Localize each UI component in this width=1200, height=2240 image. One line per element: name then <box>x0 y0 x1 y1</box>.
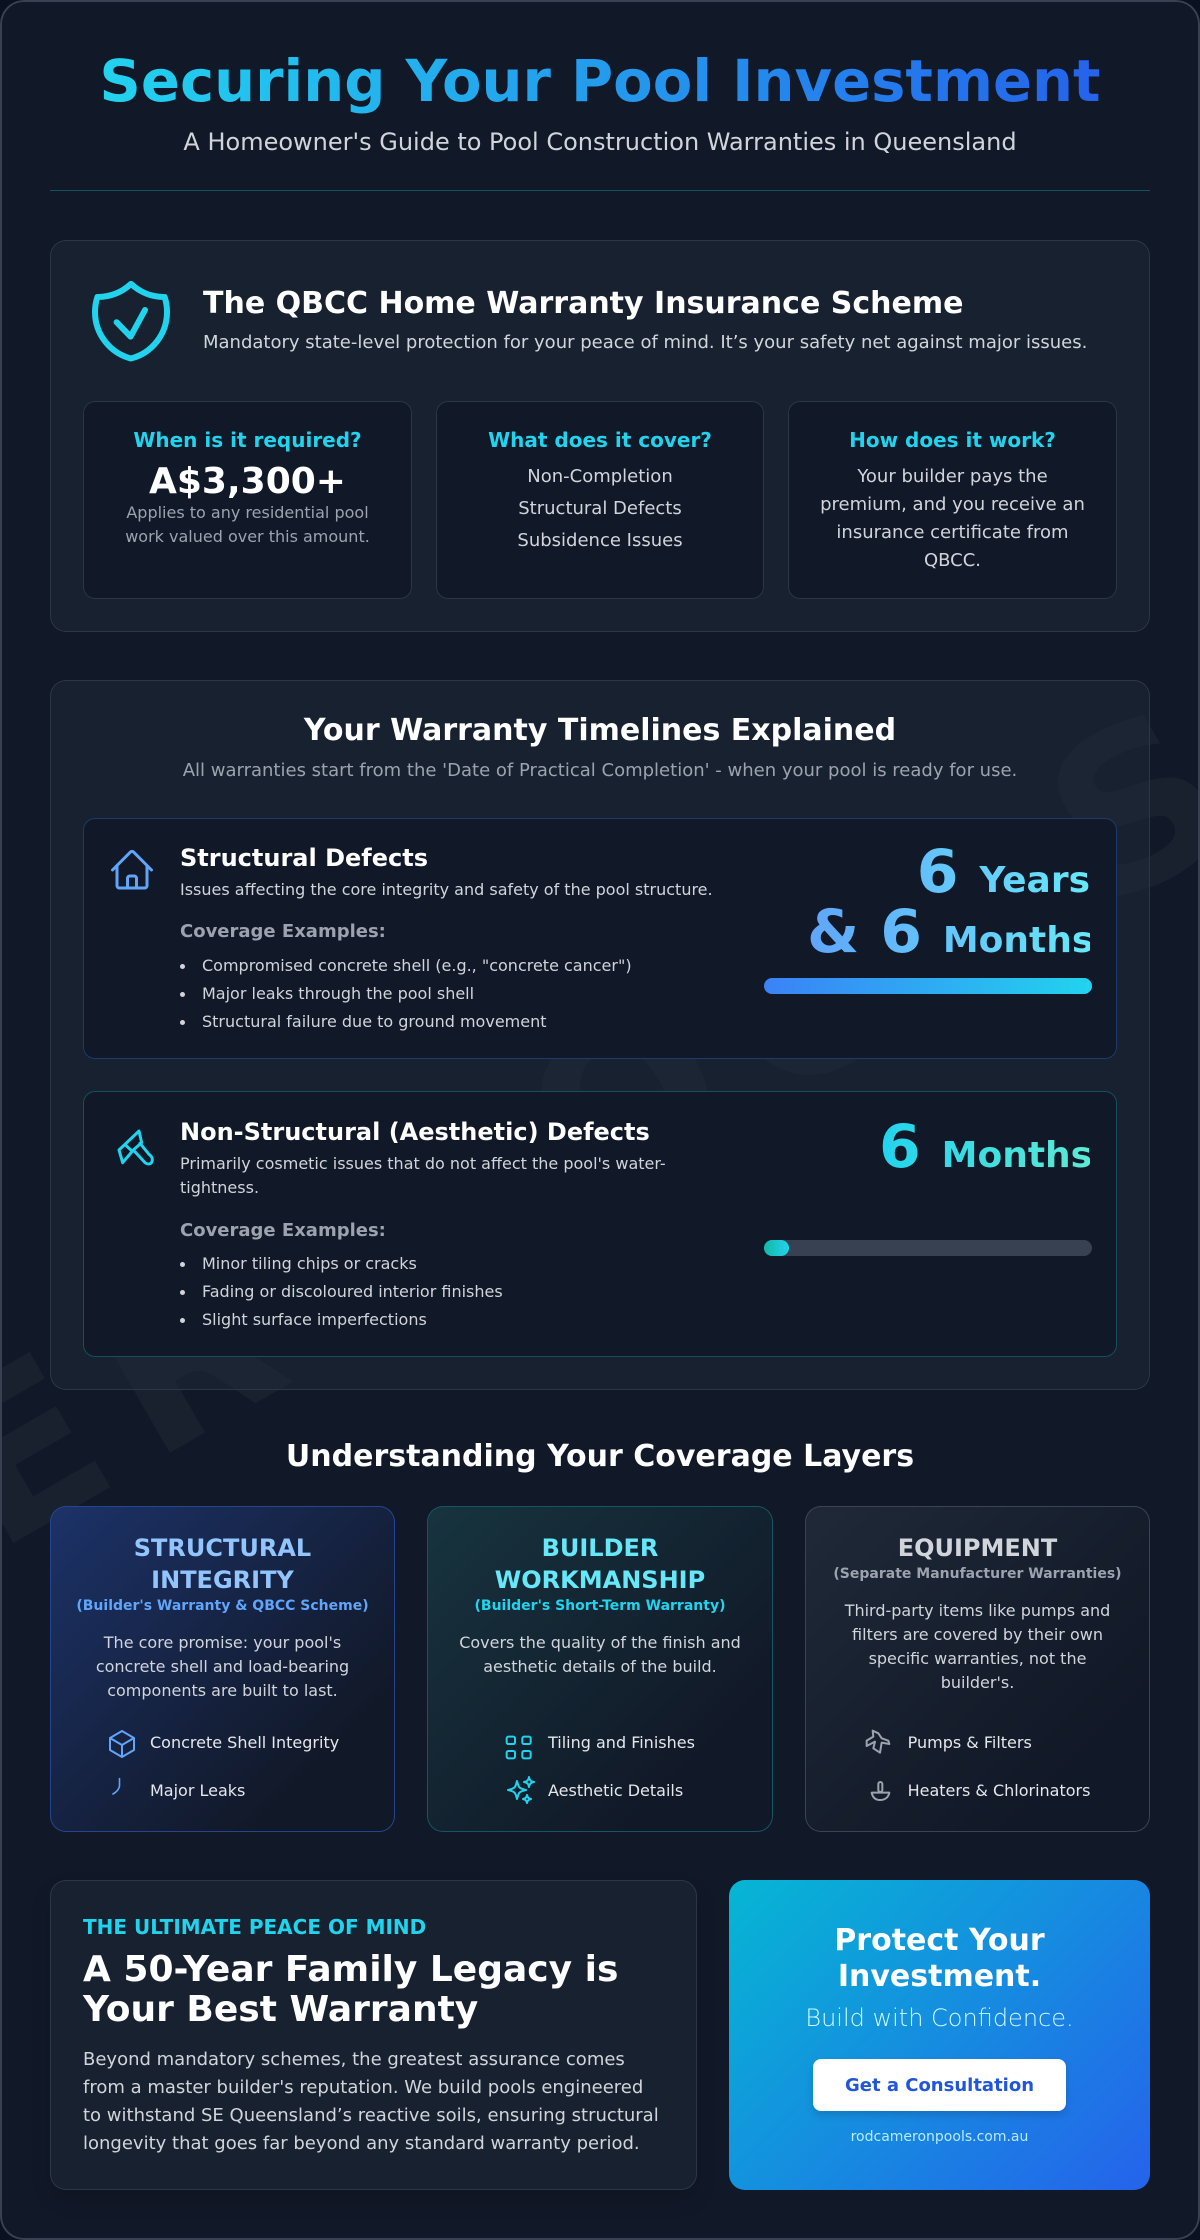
layer description: components are built to last. <box>107 1681 338 1700</box>
layer subtitle: (Builder's Short-Term Warranty) <box>475 1598 725 1614</box>
panel description: All warranties start from the 'Date of Practical Completion' - when your pool is ready for use. <box>183 760 1017 781</box>
duration: 6 years and 6 months <box>807 842 1090 966</box>
card heading: What does it cover? <box>488 428 712 452</box>
panel heading: Your Warranty Timelines Explained <box>304 713 896 748</box>
eyebrow: THE ULTIMATE PEACE OF MIND <box>83 1915 426 1939</box>
icon: hammer <box>118 1130 154 1166</box>
cta tagline: Build with Confidence. <box>805 2004 1074 2032</box>
item: pumps: Pumps & Filters <box>908 1733 1032 1752</box>
explanation: premium, and you receive an <box>820 494 1085 515</box>
layer title: INTEGRITY <box>151 1566 294 1594</box>
layer description: specific warranties, not the <box>869 1649 1086 1668</box>
icon: leak <box>112 1778 120 1795</box>
threshold note <box>125 503 370 546</box>
coverage list: Structural Defects <box>518 498 682 519</box>
legacy text: longevity that goes far beyond any standard warranty period. <box>83 2133 640 2154</box>
card: when is it required <box>83 401 412 599</box>
layer description: filters are covered by their own <box>852 1625 1103 1644</box>
icon: shield with check <box>92 280 170 362</box>
card heading: Structural Defects <box>180 844 428 872</box>
duration bar partial <box>764 1240 1092 1256</box>
card description: tightness. <box>180 1178 259 1197</box>
layer subtitle: (Builder's Warranty & QBCC Scheme) <box>76 1598 369 1614</box>
layer description <box>844 1601 1110 1692</box>
card description <box>180 1154 666 1197</box>
panel description: Mandatory state-level protection for your peace of mind. It’s your safety net against major issues. <box>203 332 1087 353</box>
coverage label: Coverage Examples: <box>180 1220 386 1241</box>
item: major leaks: Major Leaks <box>150 1781 245 1800</box>
panel: QBCC home warranty scheme <box>50 240 1150 632</box>
legacy text: from a master builder's reputation. We build pools engineered <box>83 2077 643 2098</box>
duration: 6 years and 6 months: 6 Years <box>917 837 1090 907</box>
coverage label: Coverage Examples: <box>180 921 386 942</box>
card description: Primarily cosmetic issues that do not affect the pool's water- <box>180 1154 666 1173</box>
cta heading <box>834 1923 1045 1994</box>
layer title <box>495 1534 705 1594</box>
cta heading: Protect Your <box>834 1923 1045 1958</box>
cta button <box>813 2059 1066 2111</box>
explanation: insurance certificate from <box>836 522 1069 543</box>
icon: sparkles <box>507 1776 535 1804</box>
legacy text: to withstand SE Queensland’s reactive soils, ensuring structural <box>83 2105 659 2126</box>
layer description: The core promise: your pool's <box>104 1633 341 1652</box>
coverage list: Non-Completion <box>527 466 673 487</box>
coverage examples list: Minor tiling chips or cracks <box>202 1254 417 1273</box>
card: how does it work <box>788 401 1117 599</box>
layer title: BUILDER <box>542 1534 658 1562</box>
card heading: How does it work? <box>849 428 1056 452</box>
explanation: QBCC. <box>924 550 981 571</box>
coverage examples list: Structural failure due to ground movement <box>202 1012 546 1031</box>
coverage examples list: Fading or discoloured interior finishes <box>202 1282 503 1301</box>
coverage list <box>517 466 683 551</box>
explanation <box>820 466 1085 571</box>
coverage examples list: Compromised concrete shell (e.g., "concrete cancer") <box>202 956 632 975</box>
layer subtitle: (Separate Manufacturer Warranties) <box>833 1566 1122 1582</box>
title: Securing Your Pool Investment <box>99 48 1101 115</box>
item: tiling: Tiling and Finishes <box>548 1733 695 1752</box>
duration: 6 months: 6 Months <box>879 1112 1092 1182</box>
legacy heading: A 50-Year Family Legacy is <box>83 1949 618 1990</box>
bar fill <box>764 1240 789 1256</box>
card: what does it cover <box>436 401 764 599</box>
panel: builder workmanship <box>427 1506 773 1832</box>
card heading: Non-Structural (Aesthetic) Defects <box>180 1118 650 1146</box>
panel: warranty timelines <box>50 680 1150 1390</box>
layer description: concrete shell and load-bearing <box>96 1657 349 1676</box>
panel heading: The QBCC Home Warranty Insurance Scheme <box>203 286 963 321</box>
panel: call to action <box>729 1880 1150 2190</box>
icon: heater <box>870 1781 890 1801</box>
panel: equipment <box>805 1506 1150 1832</box>
subtitle: A Homeowner's Guide to Pool Construction Warranties in Queensland <box>183 128 1017 156</box>
card: non-structural defects <box>83 1091 1117 1357</box>
duration: 6 years and 6 months: & 6 Months <box>807 897 1093 967</box>
threshold note: work valued over this amount. <box>125 527 370 546</box>
explanation: Your builder pays the <box>857 466 1048 487</box>
layer description: Third-party items like pumps and <box>845 1601 1110 1620</box>
coverage list: Subsidence Issues <box>517 530 683 551</box>
coverage examples list <box>180 956 632 1031</box>
layer title: EQUIPMENT <box>898 1534 1057 1562</box>
coverage examples list: Major leaks through the pool shell <box>202 984 474 1003</box>
layer title: STRUCTURAL <box>134 1534 311 1562</box>
coverage examples list: Slight surface imperfections <box>202 1310 427 1329</box>
layer description: builder's. <box>941 1673 1014 1692</box>
card heading: When is it required? <box>133 428 362 452</box>
duration bar full <box>764 978 1092 994</box>
legacy text: Beyond mandatory schemes, the greatest assurance comes <box>83 2049 625 2070</box>
legacy heading: Your Best Warranty <box>83 1989 478 2030</box>
icon: cube <box>109 1730 135 1758</box>
item: aesthetic details: Aesthetic Details <box>548 1781 683 1800</box>
layer title: WORKMANSHIP <box>495 1566 705 1594</box>
section heading: coverage layers: Understanding Your Coverage Layers <box>286 1439 914 1474</box>
website: rodcameronpools.com.au <box>851 2129 1028 2145</box>
icon: pump fan <box>866 1730 890 1754</box>
panel: family legacy <box>50 1880 697 2190</box>
layer description <box>96 1633 349 1700</box>
panel: structural integrity <box>50 1506 395 1832</box>
icon: house <box>110 850 154 890</box>
layer description: aesthetic details of the build. <box>483 1657 717 1676</box>
layer description: Covers the quality of the finish and <box>459 1633 741 1652</box>
card description: Issues affecting the core integrity and safety of the pool structure. <box>180 880 713 899</box>
icon: tiles <box>506 1736 532 1760</box>
layer description <box>459 1633 741 1676</box>
layer title <box>134 1534 311 1594</box>
item: heaters: Heaters & Chlorinators <box>908 1781 1090 1800</box>
cta heading: Investment. <box>838 1959 1041 1994</box>
cta button: Get a Consultation <box>845 2075 1034 2096</box>
legacy text <box>83 2049 659 2154</box>
threshold note: Applies to any residential pool <box>126 503 369 522</box>
card: structural defects <box>83 818 1117 1059</box>
threshold value: A$3,300+ <box>149 461 346 502</box>
item: concrete shell: Concrete Shell Integrity <box>150 1733 339 1752</box>
legacy heading <box>82 1949 618 2030</box>
coverage examples list <box>180 1254 503 1329</box>
